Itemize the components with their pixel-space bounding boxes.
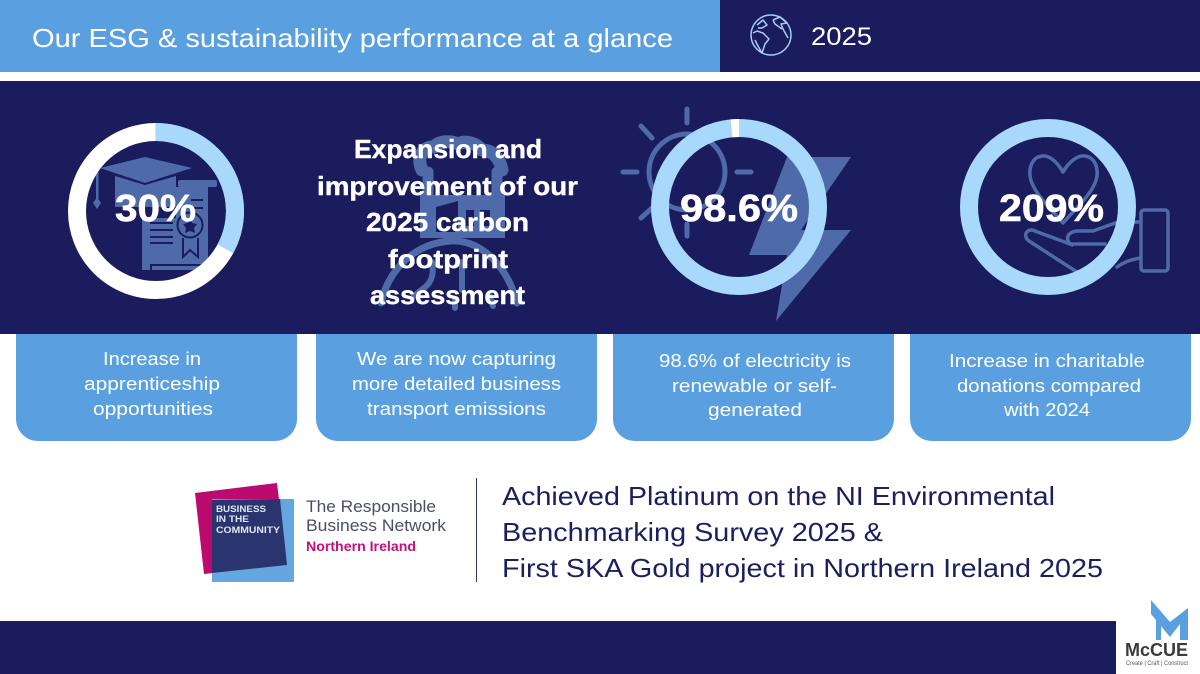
- icon: graduation cap and certificate: [93, 157, 217, 270]
- stat: 30%: 30%: [115, 188, 196, 230]
- heading: carbon footprint: improvement of our: [317, 171, 578, 201]
- stat: 209%: 209%: [999, 188, 1104, 230]
- heading: carbon footprint: footprint: [388, 244, 508, 274]
- stat: 98.6%: 98.6%: [680, 188, 798, 230]
- icon: light bulb rays: [623, 109, 751, 236]
- card: charitable donations: [910, 334, 1191, 441]
- logo: McCUE: [1125, 600, 1188, 667]
- heading: carbon footprint: [317, 134, 578, 310]
- chart: 98.6% donut: [653, 121, 825, 293]
- header: title bar: [0, 0, 720, 72]
- header: title bar: Our ESG & sustainability performance at a glance: [32, 23, 673, 53]
- header: year panel: 2025: [811, 23, 872, 51]
- card: renewable electricity: [613, 334, 894, 441]
- card: renewable electricity: generated: [708, 399, 802, 420]
- panel: navy KPI band: [0, 81, 1200, 334]
- card: apprenticeships: apprenticeship: [84, 373, 220, 394]
- logo: Business in the Community: [195, 483, 447, 582]
- card: transport emissions: We are now capturing: [357, 348, 556, 369]
- card: apprenticeships: [16, 334, 297, 441]
- footer bar: [0, 621, 1116, 674]
- card: transport emissions: more detailed business: [352, 373, 561, 394]
- heading: carbon footprint: assessment: [370, 280, 525, 310]
- text: achievements: [502, 481, 1103, 583]
- logo: McCUE: Create | Craft | Construct: [1126, 661, 1188, 667]
- card: charitable donations: with 2024: [1003, 399, 1090, 420]
- text: achievements: Benchmarking Survey 2025 &: [502, 517, 883, 547]
- icon: heart in hand: [1026, 156, 1168, 272]
- card: renewable electricity: 98.6% of electricity is: [659, 350, 851, 371]
- text: achievements: Achieved Platinum on the NI Environmental: [502, 481, 1055, 511]
- logo: Business in the Community: COMMUNITY: [216, 525, 281, 536]
- card: transport emissions: [316, 334, 597, 441]
- card: apprenticeships: Increase in: [103, 348, 201, 369]
- logo: Business in the Community: BUSINESS: [216, 504, 266, 515]
- card: transport emissions: transport emissions: [367, 398, 546, 419]
- logo: Business in the Community: Northern Ireland: [306, 539, 416, 554]
- card: renewable electricity: renewable or self-: [672, 375, 837, 396]
- header: year panel: [720, 0, 1200, 72]
- chart: 30% donut: [77, 132, 235, 290]
- card: charitable donations: donations compared: [957, 375, 1141, 396]
- logo: Business in the Community: IN THE: [216, 514, 249, 525]
- logo: McCUE: McCUE: [1125, 640, 1188, 660]
- logo: Business in the Community: Business Network: [306, 516, 447, 535]
- icon: lightning bolt: [749, 157, 851, 321]
- logo: Business in the Community: The Responsible: [306, 497, 436, 516]
- icon: globe: [751, 15, 791, 55]
- heading: carbon footprint: Expansion and: [354, 134, 542, 164]
- icon: factory on hand: [381, 142, 517, 308]
- chart: 209% donut: [969, 128, 1127, 286]
- card: charitable donations: Increase in charitable: [949, 350, 1145, 371]
- text: achievements: First SKA Gold project in Northern Ireland 2025: [502, 553, 1103, 583]
- card: apprenticeships: opportunities: [93, 398, 213, 419]
- heading: carbon footprint: 2025 carbon: [366, 207, 529, 237]
